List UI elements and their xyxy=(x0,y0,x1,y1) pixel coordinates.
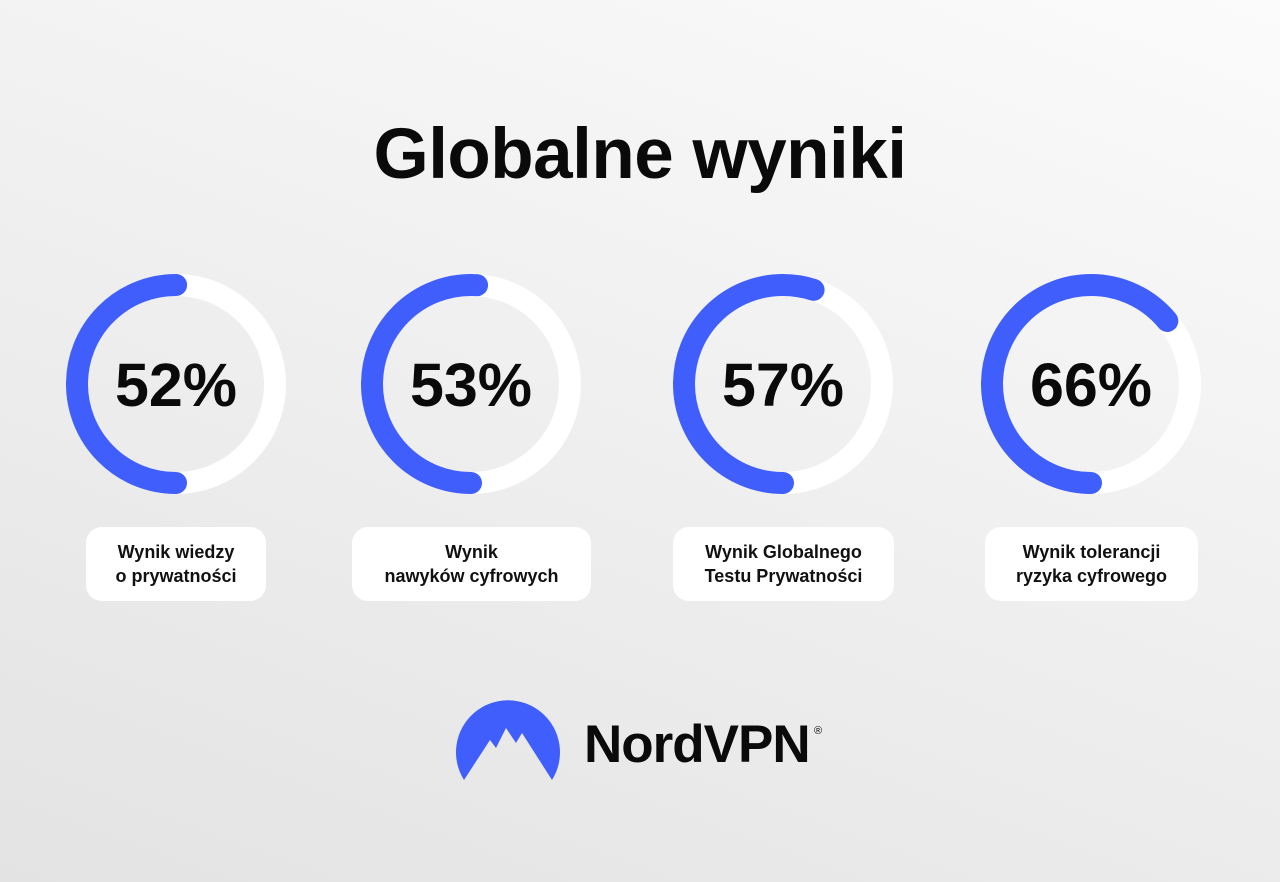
label 4: Wynik tolerancji xyxy=(1023,542,1160,562)
label 2 xyxy=(352,527,591,601)
donut: 57% xyxy=(684,285,882,483)
donut: 66%: 66% xyxy=(1030,351,1152,419)
label 4: ryzyka cyfrowego xyxy=(1016,566,1167,586)
label 2: Wynik xyxy=(445,542,498,562)
label 1: o prywatności xyxy=(115,566,237,586)
logo: NordVPN: ® xyxy=(814,725,822,737)
label 3: Testu Prywatności xyxy=(705,566,862,586)
title: Globalne wyniki xyxy=(373,115,906,194)
label 3 xyxy=(673,527,894,601)
logo: NordVPN: NordVPN xyxy=(584,715,810,774)
donut: 52%: 52% xyxy=(115,351,237,419)
label 2: nawyków cyfrowych xyxy=(384,566,559,586)
donut: 57%: 57% xyxy=(722,351,844,419)
label 3: Wynik Globalnego xyxy=(705,542,862,562)
logo: NordVPN xyxy=(456,700,822,780)
label 1: Wynik wiedzy xyxy=(118,542,234,562)
donut: 53% xyxy=(372,285,570,483)
label 4 xyxy=(985,527,1198,601)
donut: 52% xyxy=(77,285,275,483)
donut: 66% xyxy=(992,285,1190,483)
label 1 xyxy=(86,527,266,601)
donut: 53%: 53% xyxy=(410,351,532,419)
